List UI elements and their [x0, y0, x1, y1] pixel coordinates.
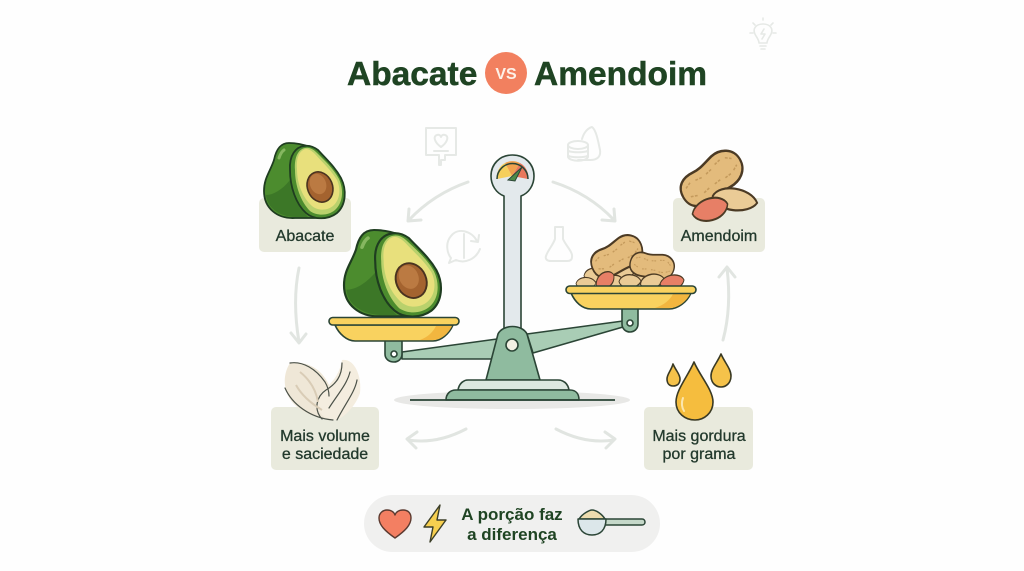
icon: lightning — [424, 505, 446, 542]
panel: mais volume — [271, 360, 379, 470]
arrow: gordura to amendoim — [719, 267, 735, 340]
label amendoim: Amendoim — [681, 228, 757, 245]
left hanger — [385, 340, 402, 362]
icon: fibers — [285, 360, 360, 420]
label mais gordura: por grama — [663, 446, 736, 463]
label abacate: Abacate — [276, 228, 334, 245]
panel: mais gordura — [644, 354, 753, 470]
arrow: scale to nutrition top left — [408, 182, 468, 221]
title: Amendoim — [534, 56, 707, 93]
title: Abacate — [347, 56, 477, 93]
icon: oil drops — [667, 354, 731, 420]
arrow: bottom right — [556, 429, 615, 448]
icon: avocado — [264, 143, 345, 218]
scale right beam — [527, 321, 623, 353]
icon: light bulb — [750, 18, 776, 49]
callout: portion — [364, 495, 660, 552]
panel: abacate — [259, 143, 351, 252]
label mais volume: e saciedade — [282, 446, 368, 463]
title — [347, 52, 707, 94]
callout text: a diferença — [467, 525, 557, 544]
scale base — [410, 326, 615, 400]
scale — [329, 155, 696, 409]
arrow: scale to nutrition top right — [553, 182, 615, 221]
scale left beam — [402, 339, 497, 359]
vs badge — [485, 52, 527, 94]
icon: heart — [379, 510, 411, 538]
vs badge: VS — [495, 66, 517, 83]
icon: peanuts — [672, 144, 759, 222]
icon: cycle — [447, 231, 480, 263]
right hanger — [622, 308, 638, 332]
peanut pile on right pan — [576, 231, 684, 291]
big avocado on scale — [344, 230, 441, 317]
icon: heart clipboard — [426, 128, 456, 165]
scale pole and gauge — [491, 155, 534, 332]
arrow: abacate to volume — [291, 268, 306, 343]
left pan — [329, 318, 459, 341]
icon: flask — [546, 227, 572, 261]
label mais volume: Mais volume — [280, 428, 370, 445]
right pan — [566, 286, 696, 309]
icon: muscle and coins — [568, 127, 600, 161]
icon: scoop — [578, 510, 645, 535]
label mais gordura: Mais gordura — [652, 428, 746, 445]
callout text: A porção faz — [461, 505, 563, 524]
panel: amendoim — [672, 144, 765, 252]
arrow: bottom left — [407, 429, 466, 448]
scale shadow — [394, 391, 630, 409]
